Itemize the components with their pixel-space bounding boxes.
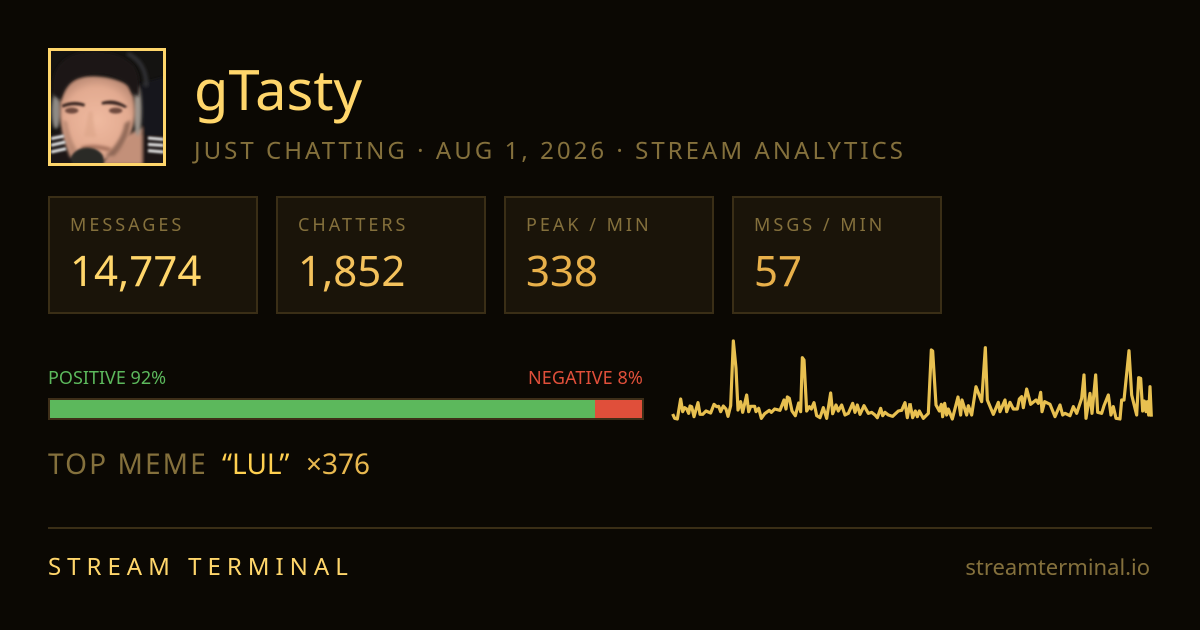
negative sentiment label: NEGATIVE 8%	[528, 366, 643, 390]
stat card: messages: 14,774	[70, 242, 201, 299]
top meme value: “LUL”	[222, 445, 289, 483]
stat card: messages per minute: 57	[754, 242, 802, 299]
sparkline chart	[671, 339, 1153, 421]
stat card: chatters: 1,852	[298, 242, 405, 299]
positive sentiment label: POSITIVE 92%	[48, 366, 166, 390]
stat card: peak per minute: 338	[526, 242, 598, 299]
top meme count: ×376	[306, 445, 370, 483]
stat card: messages	[48, 196, 258, 314]
avatar	[48, 48, 166, 166]
stat card: peak per minute	[504, 196, 714, 314]
footer brand: STREAM TERMINAL	[48, 550, 354, 583]
stat card: messages: MESSAGES	[70, 213, 184, 237]
sentiment bar	[48, 398, 644, 420]
top meme: TOP MEME	[48, 445, 208, 483]
stat card: messages per minute: MSGS / MIN	[754, 213, 885, 237]
title: gTasty	[194, 51, 362, 127]
footer url: streamterminal.io	[965, 552, 1150, 582]
stat card: chatters	[276, 196, 486, 314]
subtitle: JUST CHATTING · AUG 1, 2026 · STREAM ANALYTICS	[194, 134, 906, 167]
stat card: messages per minute	[732, 196, 942, 314]
stat card: peak per minute: PEAK / MIN	[526, 213, 652, 237]
stat card: chatters: CHATTERS	[298, 213, 408, 237]
footer divider	[48, 527, 1152, 529]
